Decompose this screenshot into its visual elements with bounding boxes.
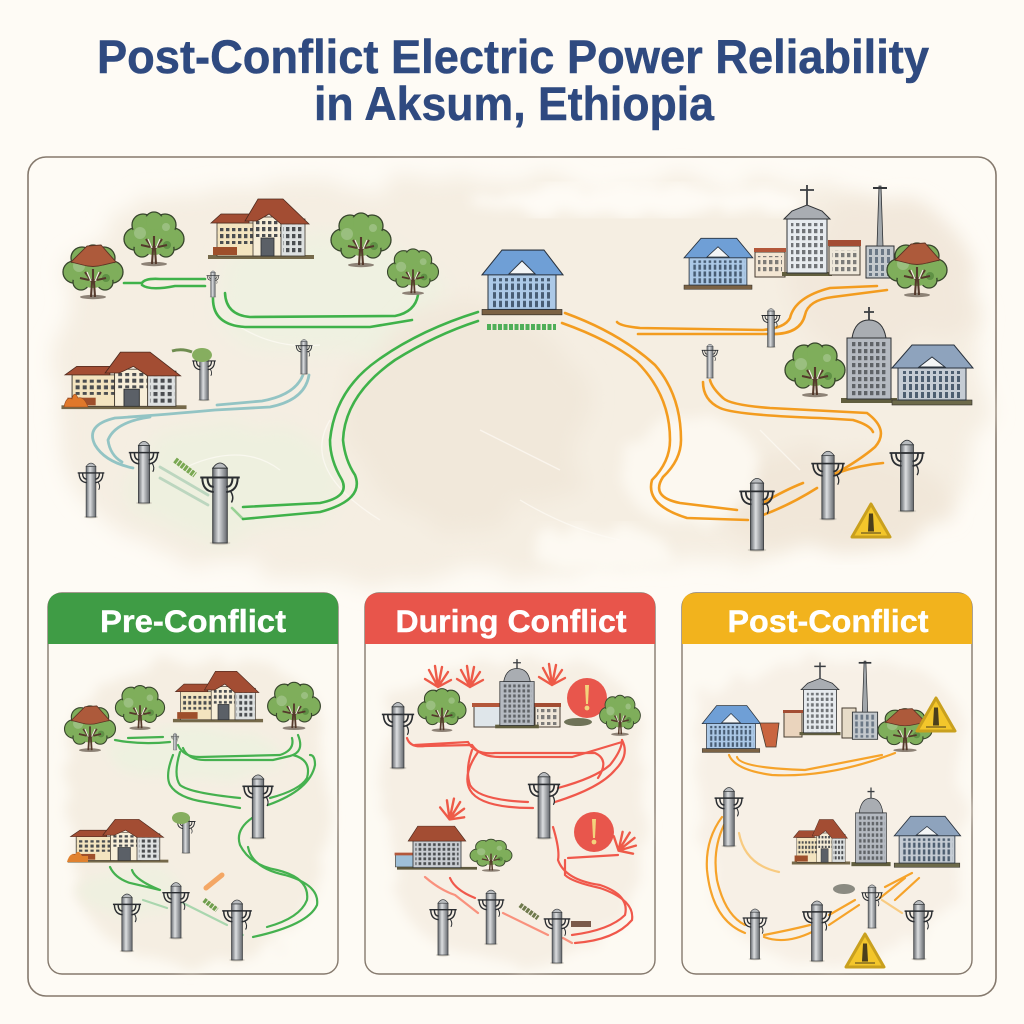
pole: [162, 883, 190, 939]
header: pre-conflict: Pre-Conflict: [100, 603, 287, 639]
pole: [242, 775, 274, 840]
pole: [905, 900, 933, 961]
burst: [539, 664, 565, 685]
small building right: [534, 703, 561, 727]
tree: [388, 249, 438, 295]
debris: [571, 921, 591, 927]
pole: [528, 773, 560, 840]
domed tower: [851, 787, 891, 866]
tree: [418, 689, 466, 732]
house: [68, 819, 168, 863]
green scrub: [204, 900, 217, 910]
pole: [544, 909, 570, 964]
title: [97, 30, 929, 130]
pole with tree: [172, 348, 216, 401]
tree: [331, 213, 391, 267]
burst: [425, 666, 451, 687]
warning sign: [852, 504, 890, 537]
map background: [60, 179, 980, 575]
panel: pre-conflict: [48, 593, 338, 974]
grey building: [894, 816, 961, 867]
small building left: [472, 703, 502, 727]
school building: [208, 199, 314, 259]
domed tower: [495, 659, 539, 728]
title: Post-Conflict Electric Power Reliability: [97, 30, 929, 83]
house: [61, 352, 187, 409]
pole: [113, 894, 141, 952]
small pole: [171, 733, 179, 750]
pole: [811, 451, 845, 521]
pole: [222, 900, 252, 962]
small red kiosk: [760, 723, 779, 747]
pole: [802, 901, 832, 963]
pole with tree: [172, 812, 196, 854]
red lines: [407, 738, 632, 943]
burst: [437, 795, 469, 824]
tree: [600, 695, 640, 736]
small pole: [207, 271, 219, 298]
central substation: [482, 250, 563, 327]
blue building: [684, 238, 753, 289]
header: pre-conflict: [48, 593, 338, 644]
orange power lines: [562, 286, 887, 520]
tree: [470, 839, 512, 872]
pole: [429, 900, 457, 956]
header: during conflict: [365, 593, 655, 644]
small building: [754, 248, 786, 277]
pole: [382, 703, 414, 770]
orange spark: [206, 875, 222, 888]
map background: [385, 660, 646, 965]
orange lines: [707, 753, 919, 940]
pole: [762, 308, 780, 348]
debris: [833, 884, 855, 894]
map background: [699, 660, 963, 965]
title: in Aksum, Ethiopia: [314, 77, 715, 130]
grey building: [892, 345, 973, 405]
grey school: [395, 826, 477, 870]
header: post-conflict: [682, 593, 972, 644]
panel: overview map: [28, 157, 996, 996]
small building: [783, 710, 803, 737]
header: post-conflict: Post-Conflict: [728, 603, 929, 639]
blue building: [702, 706, 761, 752]
tree: [785, 343, 845, 397]
map background: [66, 660, 326, 965]
green scrub: [175, 460, 195, 475]
pole: [715, 787, 743, 848]
tree: [268, 682, 320, 730]
antenna tower: [852, 661, 878, 739]
debris: [564, 718, 592, 726]
panel: during conflict: [365, 593, 655, 974]
tree: [115, 686, 165, 730]
tree: [124, 212, 184, 266]
pole: [200, 463, 240, 545]
green lines: [110, 735, 317, 937]
tree: [63, 245, 123, 299]
warning sign: [917, 698, 955, 731]
warning sign: [846, 934, 884, 967]
teal degraded lines: [92, 375, 309, 505]
panel: post-conflict: [682, 593, 972, 974]
alert: [574, 812, 614, 852]
alert: [567, 678, 607, 718]
pole: [890, 440, 924, 513]
tree with roof: [887, 243, 947, 297]
pole: [743, 909, 767, 960]
fire by house: [67, 852, 88, 862]
school building: [173, 671, 263, 722]
tree with roof: [878, 709, 932, 752]
green power lines: [124, 279, 478, 519]
tower building: [800, 662, 840, 735]
burst: [457, 666, 483, 687]
pole: [295, 339, 313, 375]
tower building: [782, 185, 832, 276]
pole: [78, 463, 104, 518]
small building: [842, 708, 856, 738]
fire by house: [64, 394, 88, 407]
pole: [861, 885, 883, 929]
green scrub: [520, 905, 538, 918]
small red building: [828, 240, 861, 275]
pole: [129, 441, 159, 505]
tree with roof: [64, 706, 116, 752]
burst: [609, 826, 642, 859]
house: [792, 820, 850, 864]
pole: [739, 478, 775, 552]
antenna tower: [866, 186, 894, 278]
header: during conflict: During Conflict: [396, 603, 627, 639]
pole: [478, 890, 504, 945]
pole: [702, 344, 718, 379]
domed tower: [841, 307, 897, 403]
